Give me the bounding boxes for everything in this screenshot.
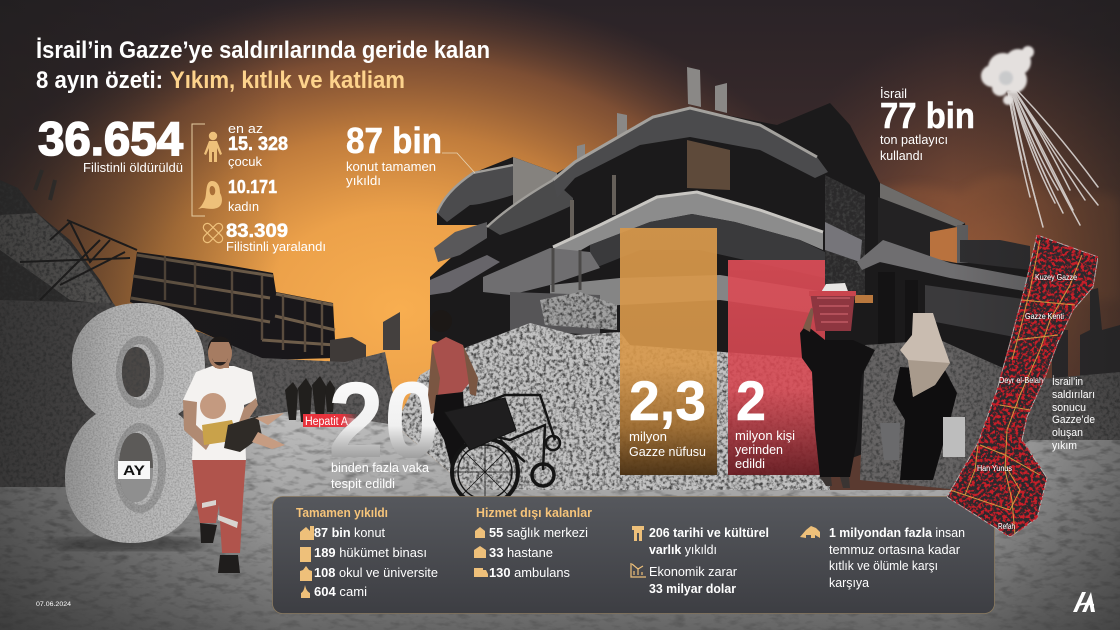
shadow below number 8 xyxy=(50,538,210,550)
map caption xyxy=(1052,375,1095,452)
column: destroyed: 87 bin konut xyxy=(314,525,385,540)
icon: historic gate xyxy=(632,526,644,541)
column: destroyed: 604 cami xyxy=(314,584,367,599)
column: famine: karşıya xyxy=(829,575,870,590)
icon: health centre xyxy=(475,527,485,538)
map labels xyxy=(977,272,1077,531)
map caption: oluşan xyxy=(1052,427,1083,439)
column xyxy=(687,140,730,190)
icon: people at risk xyxy=(800,526,820,538)
stat: 36.654 killed: Filistinli öldürüldü xyxy=(83,161,183,175)
background: rubble pile centre xyxy=(395,323,830,490)
silhouette xyxy=(430,103,1040,470)
big number: Hepatitis A cases: tespit edildi xyxy=(331,477,395,491)
bar: displaced people: milyon kişi xyxy=(735,429,795,443)
stat: wounded: 83.309 xyxy=(226,221,288,242)
stat: women xyxy=(228,177,277,214)
bar: displaced people: 2 xyxy=(736,369,766,432)
icon: falling chart xyxy=(631,563,646,577)
map labels: Gazze Kenti xyxy=(1025,311,1064,321)
map labels: Refah xyxy=(998,521,1015,531)
big number: Hepatitis A cases: binden fazla vaka xyxy=(331,461,429,475)
column: famine xyxy=(800,525,965,590)
map labels: Han Yunus xyxy=(977,463,1012,473)
panel: summary figures xyxy=(272,496,994,614)
background: right side rubble and ruins xyxy=(860,288,1120,490)
stat: 87 bin homes: 87 bin xyxy=(346,120,442,161)
bar: Gaza population: milyon xyxy=(629,430,667,444)
third slab xyxy=(483,248,600,295)
stat: 77 bin tons: kullandı xyxy=(880,148,923,163)
map: Gaza destruction xyxy=(947,235,1098,537)
icon: bandage xyxy=(202,222,224,244)
icon: woman xyxy=(198,181,222,209)
label: AY: AY xyxy=(123,462,146,478)
big number: Hepatitis A cases: Hepatit A xyxy=(305,416,348,428)
stat: children: 15. 328 xyxy=(228,134,288,155)
map roads xyxy=(950,240,1082,535)
map caption: İsrail’in xyxy=(1052,375,1083,388)
stat: wounded: Filistinli yaralandı xyxy=(226,240,326,254)
column: out of service: Hizmet dışı kalanlar xyxy=(476,506,592,520)
column: famine: temmuz ortasına kadar xyxy=(829,542,961,557)
bar: displaced people xyxy=(728,260,825,475)
right upper slab xyxy=(880,183,965,228)
map caption: yıkım xyxy=(1052,440,1077,452)
column: out of service: 130 ambulans xyxy=(489,565,570,580)
bar: Gaza population xyxy=(620,228,717,475)
right lower slab xyxy=(857,240,1030,292)
column: destroyed xyxy=(296,506,438,599)
bar: Gaza population: Gazze nüfusu xyxy=(629,445,706,459)
top main slab xyxy=(553,108,828,198)
icon: ambulance xyxy=(474,568,488,577)
background: bombed main building xyxy=(430,67,1040,470)
stat: 36.654 killed: 36.654 xyxy=(38,112,183,165)
date: 07.06.2024 xyxy=(36,601,71,608)
column: out of service xyxy=(474,506,592,580)
title: İsrail’in Gazze’ye saldırılarında geride kalan xyxy=(36,37,490,64)
person: first woman with basket xyxy=(800,283,875,488)
right dark tower xyxy=(825,175,865,300)
big concrete number 8 xyxy=(65,303,205,543)
big number: Hepatitis A cases: 20 xyxy=(328,359,440,480)
logo: AA xyxy=(1073,592,1095,612)
icon: houses xyxy=(300,526,314,540)
slab rubble xyxy=(540,292,617,330)
upper left slabs xyxy=(437,165,513,222)
title: Yıkım, kıtlık ve katliam xyxy=(170,67,405,94)
column: heritage and economy: 33 milyar dolar xyxy=(649,581,736,596)
bar: displaced people: edildi xyxy=(735,457,765,471)
map caption: Gazze’de xyxy=(1052,414,1095,426)
leader line xyxy=(442,153,475,173)
column: destroyed: Tamamen yıkıldı xyxy=(296,506,388,520)
stat: 87 bin homes xyxy=(346,120,442,188)
background: road and ground xyxy=(0,410,1120,630)
column: out of service: 33 hastane xyxy=(489,545,553,560)
icon: government building xyxy=(300,547,311,562)
label: AY xyxy=(118,461,150,479)
bar: displaced people: yerinden xyxy=(735,443,783,457)
column: out of service: 55 sağlık merkezi xyxy=(489,525,588,540)
bar: Gaza population: 2,3 xyxy=(629,369,706,432)
stat: women: kadın xyxy=(228,199,259,214)
stat: 87 bin homes: yıkıldı xyxy=(346,173,381,188)
background: collapsed structure on far left xyxy=(0,170,137,500)
map caption: saldırıları xyxy=(1052,389,1095,401)
map labels: Kuzey Gazze xyxy=(1035,272,1077,282)
title xyxy=(36,37,490,94)
column: heritage and economy: 206 tarihi ve kültürel xyxy=(649,525,769,540)
map labels: Deyr el-Belah xyxy=(999,375,1043,385)
icon: white phosphorus shell xyxy=(981,46,1098,227)
icon: wheelchair xyxy=(444,395,560,505)
column: famine: 1 milyondan fazla insan xyxy=(829,525,965,540)
stat: 87 bin homes: konut tamamen xyxy=(346,159,436,174)
column: destroyed: 189 hükümet binası xyxy=(314,545,427,560)
pillars on roof xyxy=(577,67,727,166)
stat: 77 bin tons: İsrail xyxy=(880,86,907,101)
icon: hospital xyxy=(474,546,486,558)
stat: women: 10.171 xyxy=(228,177,277,197)
icon: mosque xyxy=(301,585,310,598)
stat: 77 bin tons: ton patlayıcı xyxy=(880,132,948,147)
stat: children xyxy=(228,121,288,169)
second main slab xyxy=(553,192,823,266)
person: paramedic carrying child xyxy=(183,336,285,573)
concrete tower xyxy=(513,157,557,204)
column: destroyed: 108 okul ve üniversite xyxy=(314,565,438,580)
column: heritage and economy: Ekonomik zarar xyxy=(649,564,738,579)
column: famine: kıtlık ve ölümle karşı xyxy=(829,558,938,573)
title: 8 ayın özeti: xyxy=(36,67,163,94)
map caption: sonucu xyxy=(1052,402,1086,414)
column: heritage and economy: varlık yıkıldı xyxy=(649,542,717,557)
background: burnt apartment block xyxy=(130,252,400,362)
icon: child xyxy=(204,132,222,162)
group of people in distance xyxy=(285,376,335,422)
stat: children: çocuk xyxy=(228,154,262,169)
stat: 77 bin tons xyxy=(880,86,975,163)
stat: children: en az xyxy=(228,121,263,136)
child xyxy=(200,393,285,452)
person: second woman xyxy=(880,313,965,480)
bracket xyxy=(192,124,205,216)
person: young man pushing wheelchair xyxy=(428,310,478,470)
stat: wounded xyxy=(226,221,326,254)
stat: 77 bin tons: 77 bin xyxy=(880,95,975,136)
column: heritage and economy xyxy=(631,525,769,596)
background: left rubble field xyxy=(0,300,400,490)
icon: school xyxy=(300,566,312,581)
